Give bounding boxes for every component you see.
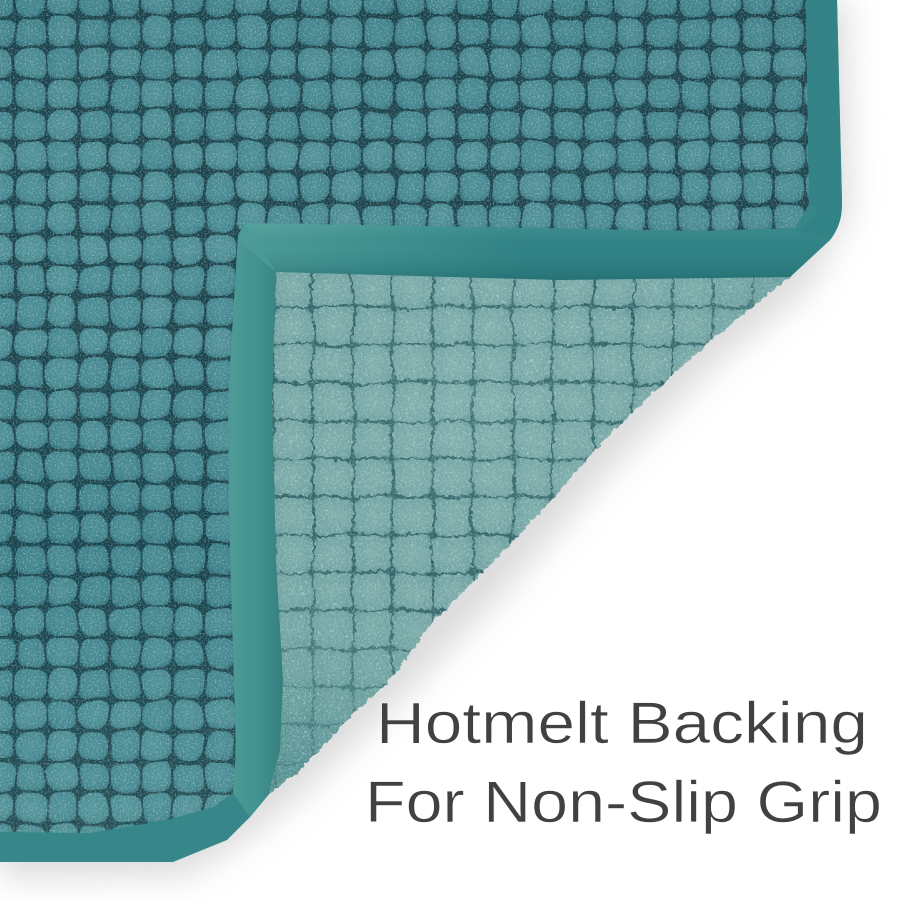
- right binding band: [806, 0, 842, 206]
- fold binding: vertical strip: [228, 223, 283, 817]
- caption: [365, 691, 882, 835]
- caption line 2: For Non-Slip Grip: [365, 770, 882, 835]
- caption line 1: Hotmelt Backing: [376, 691, 868, 756]
- fold binding: horizontal strip: [238, 205, 842, 280]
- backing: reverse side of folded corner: [270, 272, 792, 794]
